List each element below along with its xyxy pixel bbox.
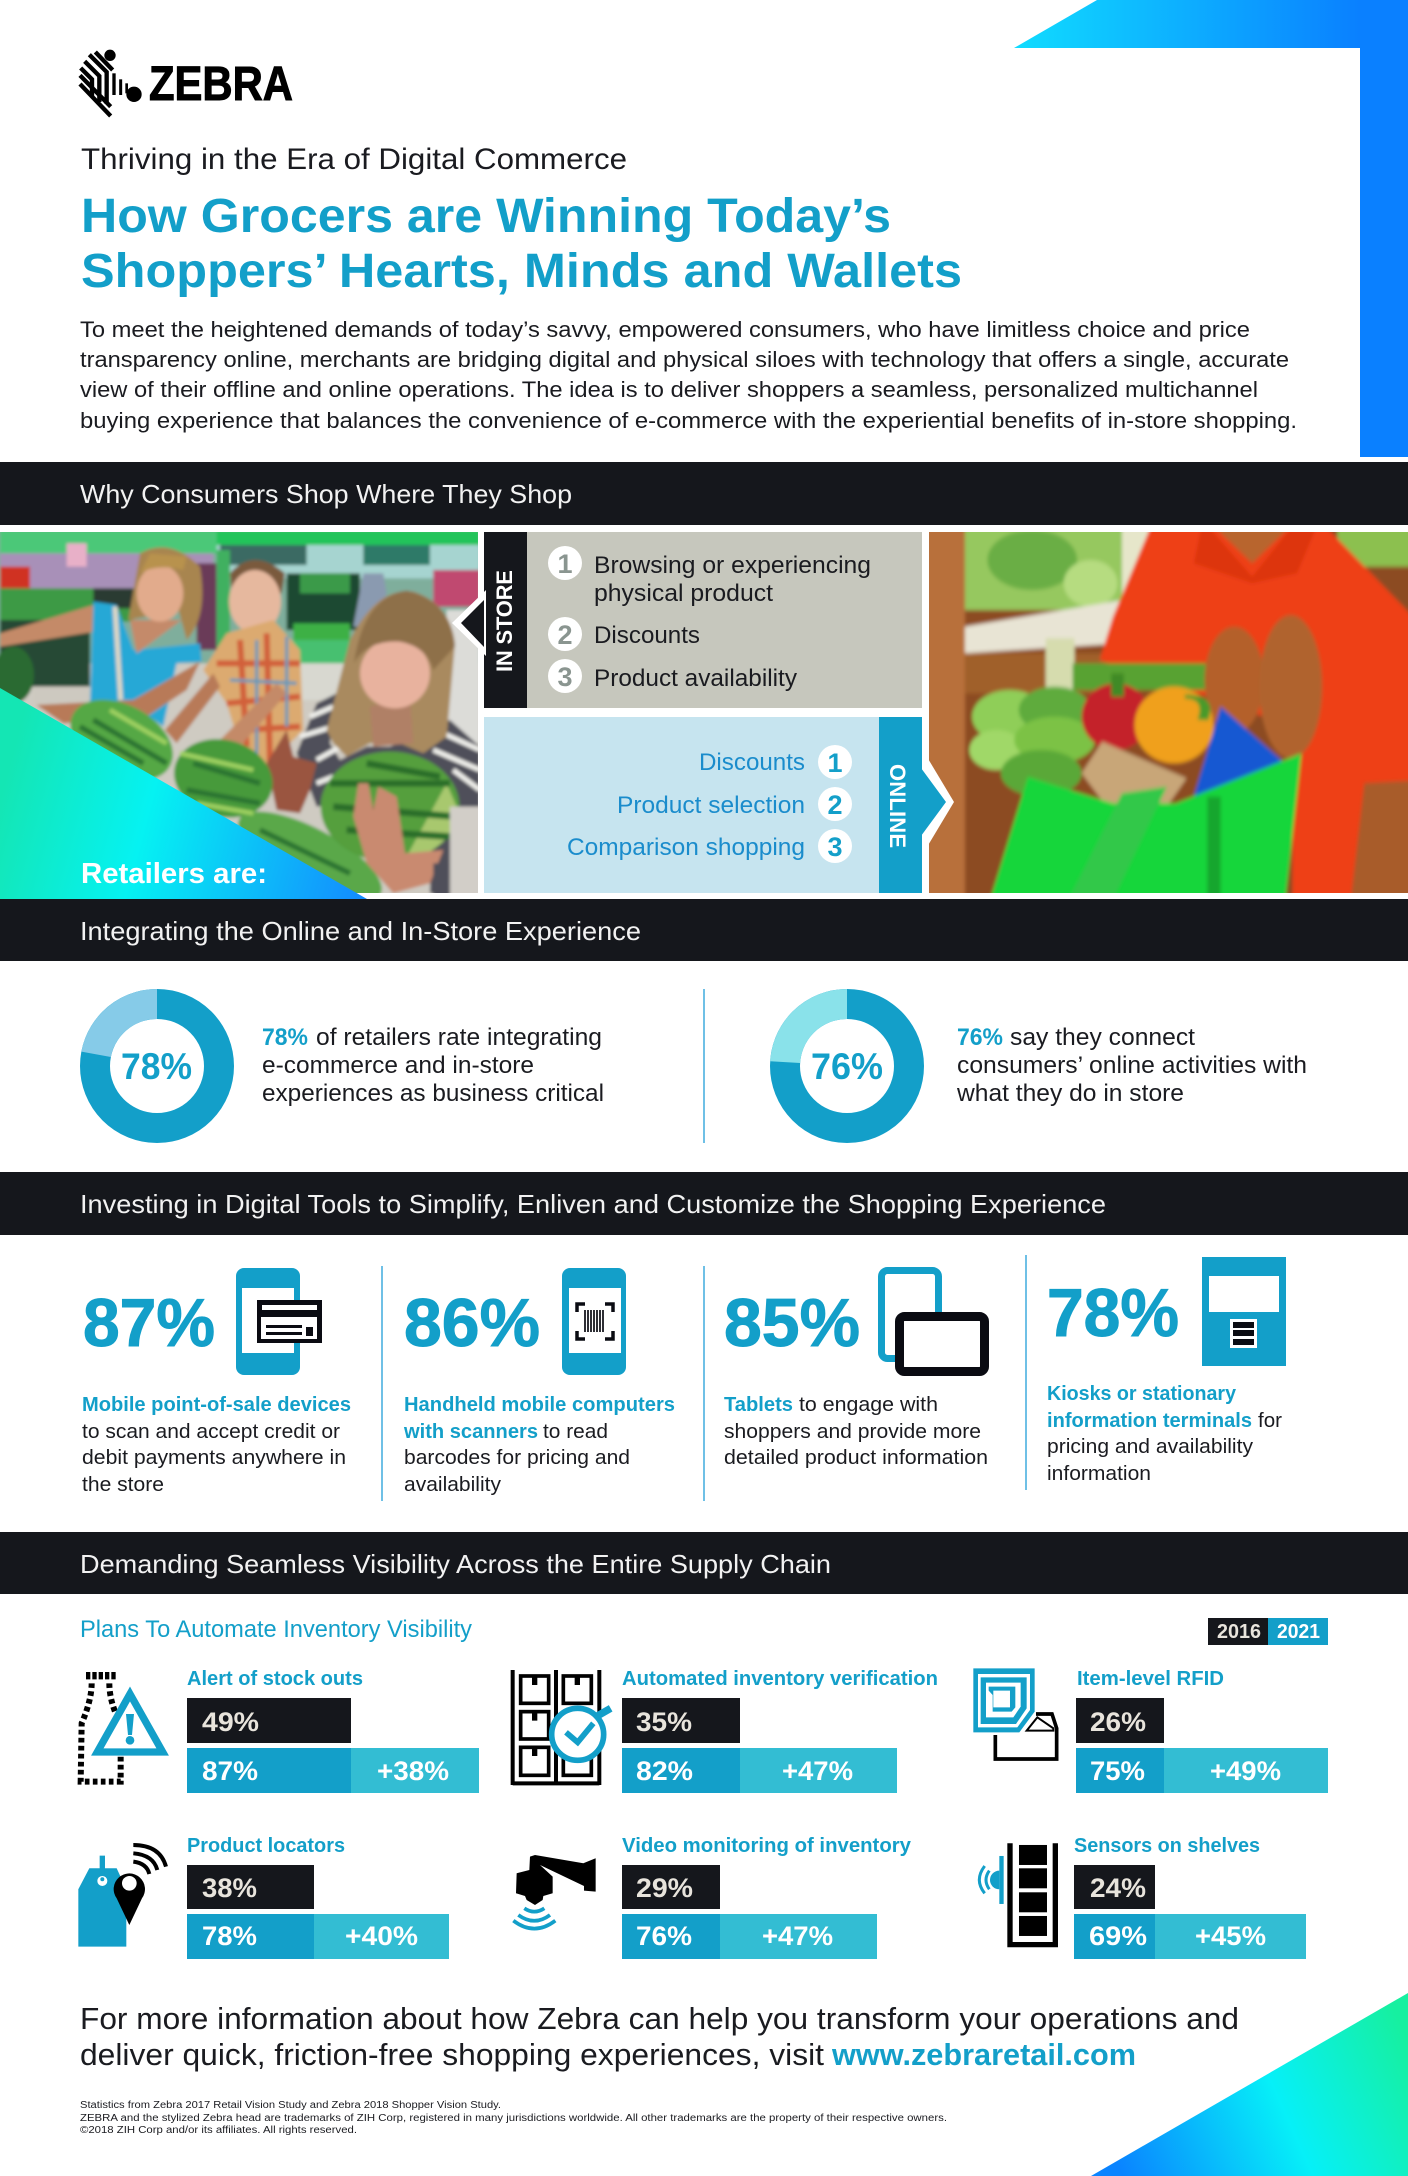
panel: in store xyxy=(452,532,922,708)
item: product locators: Product locators xyxy=(187,1834,345,1857)
item: automated inventory verification: +47% xyxy=(782,1756,853,1786)
donut chart: 76% xyxy=(770,989,909,1128)
panel: online: Discounts xyxy=(699,749,805,776)
panel: online: Product selection xyxy=(617,792,805,819)
call to action: deliver quick, friction-free shopping experiences, visit xyxy=(80,2037,824,2072)
item: sensors on shelves: 69% xyxy=(1089,1921,1147,1951)
item: video monitoring: +47% xyxy=(762,1921,833,1951)
watermelons xyxy=(0,647,34,703)
section band: why consumers shop: Why Consumers Shop Where They Shop xyxy=(80,479,572,509)
logo: Zebra xyxy=(80,50,293,116)
tool: tablets: detailed product information xyxy=(724,1446,988,1469)
item: video monitoring: 29% xyxy=(636,1873,693,1903)
donut chart: 78%: 78% xyxy=(121,1046,192,1087)
panel: online: 1 xyxy=(827,748,843,778)
donut chart: 76%: 76% xyxy=(811,1046,883,1087)
item: sensors on shelves: Sensors on shelves xyxy=(1074,1834,1260,1857)
icon: rfid tag on box xyxy=(973,1668,1057,1759)
title: Shoppers’ Hearts, Minds and Wallets xyxy=(81,245,962,298)
stat text: 76%: consumers’ online activities with xyxy=(957,1052,1307,1079)
panel: online: Comparison shopping xyxy=(567,834,805,861)
call to action: www.zebraretail.com xyxy=(831,2037,1136,2072)
stat text: 76% xyxy=(956,1024,1307,1107)
shoppers xyxy=(0,605,95,647)
panel: in store: Discounts xyxy=(594,622,700,649)
tool: kiosks: information terminals xyxy=(1047,1409,1252,1432)
tool: mobile point-of-sale xyxy=(82,1268,351,1496)
tool: handheld mobile computers: availability xyxy=(404,1473,502,1496)
tool: handheld mobile computers xyxy=(403,1268,675,1496)
tool: tablets: Tablets xyxy=(724,1393,793,1416)
item: video monitoring xyxy=(513,1834,912,1959)
decorative corner: top right gradient xyxy=(1014,0,1408,457)
stat text: 78%: e-commerce and in-store xyxy=(262,1052,534,1079)
tool: mobile point-of-sale: Mobile point-of-sale devices xyxy=(82,1393,351,1416)
legend: years: 2016 xyxy=(1217,1621,1261,1643)
legend: years: 2021 xyxy=(1277,1621,1320,1643)
decorative corner: bottom right gradient xyxy=(1091,1993,1408,2176)
intro paragraph: buying experience that balances the convenience of e-commerce with the experiential benefits of in-store shopping. xyxy=(80,408,1297,433)
tool: handheld mobile computers: 86% xyxy=(404,1285,540,1361)
tool: tablets xyxy=(724,1270,988,1469)
tool: kiosks: information xyxy=(1047,1462,1151,1485)
icon: stock-out alert xyxy=(81,1676,163,1782)
icon: security camera xyxy=(513,1855,596,1929)
photo: grocery bag delivery xyxy=(911,520,1408,900)
call to action: For more information about how Zebra can help you transform your operations and xyxy=(80,2001,1239,2036)
item: product locators: 78% xyxy=(202,1921,257,1951)
tool: kiosks: Kiosks or stationary xyxy=(1047,1382,1237,1405)
tool: kiosks: pricing and availability xyxy=(1047,1435,1254,1458)
item: alert of stock outs: +38% xyxy=(377,1756,449,1786)
tool: handheld mobile computers: to read xyxy=(543,1420,608,1443)
panel: in store: 1 xyxy=(557,549,573,579)
stat text: 76%: say they connect xyxy=(1010,1024,1195,1051)
icon: tag with location pin xyxy=(78,1845,166,1947)
item: item-level rfid: Item-level RFID xyxy=(1077,1667,1224,1690)
item: item-level rfid: +49% xyxy=(1210,1756,1281,1786)
intro paragraph xyxy=(80,317,1297,433)
section band: digital tools: Investing in Digital Tools to Simplify, Enliven and Customize the Shopping Experience xyxy=(80,1189,1106,1219)
tool: mobile point-of-sale: debit payments anywhere in xyxy=(82,1446,346,1469)
tool: handheld mobile computers: with scanners xyxy=(403,1420,538,1443)
item: sensors on shelves: +45% xyxy=(1195,1921,1266,1951)
icon: kiosk xyxy=(1202,1257,1286,1366)
intro paragraph: To meet the heightened demands of today’s savvy, empowered consumers, who have limitless choice and price xyxy=(80,317,1250,342)
tool: mobile point-of-sale: to scan and accept credit or xyxy=(82,1420,340,1443)
item: product locators: 38% xyxy=(202,1873,257,1903)
icon: shelves with check xyxy=(513,1670,611,1785)
stat text: 78% xyxy=(262,1024,604,1107)
item: item-level rfid xyxy=(973,1667,1328,1793)
item: automated inventory verification: 82% xyxy=(636,1756,693,1786)
tool: kiosks xyxy=(1047,1257,1286,1485)
stat text: 78%: experiences as business critical xyxy=(262,1080,604,1107)
item: alert of stock outs: 49% xyxy=(202,1707,259,1737)
icon: phone with barcode xyxy=(562,1268,626,1375)
tool: mobile point-of-sale: 87% xyxy=(83,1285,215,1361)
panel: in store: IN STORE xyxy=(492,570,517,672)
item: automated inventory verification: 35% xyxy=(636,1707,692,1737)
item: sensors on shelves xyxy=(979,1834,1306,1959)
legend: years xyxy=(1208,1618,1328,1645)
footnotes: Statistics from Zebra 2017 Retail Vision Study and Zebra 2018 Shopper Vision Study. xyxy=(80,2100,501,2111)
tool: handheld mobile computers: barcodes for pricing and xyxy=(404,1446,630,1469)
footnotes: ©2018 ZIH Corp and/or its affiliates. All rights reserved. xyxy=(80,2125,357,2136)
gradient corner: retailers are xyxy=(0,688,367,899)
intro paragraph: transparency online, merchants are bridging digital and physical siloes with technology that offers a single, accurate xyxy=(80,347,1289,372)
photo: family choosing watermelons xyxy=(0,532,478,893)
icon: shelf sensor xyxy=(979,1843,1055,1945)
footnotes xyxy=(80,2100,947,2136)
item: product locators xyxy=(78,1834,449,1959)
section band: integrating xyxy=(0,899,1408,961)
item: automated inventory verification: Automated inventory verification xyxy=(622,1667,938,1690)
kicker heading: Thriving in the Era of Digital Commerce xyxy=(81,143,627,176)
section band: integrating: Integrating the Online and In-Store Experience xyxy=(80,916,641,946)
stat text: 78%: of retailers rate integrating xyxy=(316,1024,602,1051)
title: How Grocers are Winning Today’s xyxy=(81,190,891,243)
item: video monitoring: 76% xyxy=(636,1921,692,1951)
item: automated inventory verification xyxy=(513,1667,938,1793)
stat text: 76%: 76% xyxy=(957,1024,1003,1051)
tool: tablets: to engage with xyxy=(799,1393,938,1416)
item: alert of stock outs: Alert of stock outs xyxy=(187,1667,363,1690)
panel: in store: 2 xyxy=(557,620,573,650)
tool: kiosks: 78% xyxy=(1047,1275,1179,1351)
tool: handheld mobile computers: Handheld mobile computers xyxy=(404,1393,675,1416)
item: sensors on shelves: 24% xyxy=(1090,1873,1146,1903)
title xyxy=(81,190,962,298)
subheading: Plans To Automate Inventory Visibility xyxy=(80,1616,472,1643)
tool: tablets: shoppers and provide more xyxy=(724,1420,981,1443)
icon: tablet pair xyxy=(882,1270,984,1372)
section band: digital tools xyxy=(0,1172,1408,1235)
panel: online: 3 xyxy=(827,832,843,862)
logo: Zebra: ZEBRA xyxy=(149,58,293,111)
item: product locators: +40% xyxy=(345,1921,418,1951)
call to action xyxy=(80,2001,1239,2072)
panel: in store: Product availability xyxy=(594,665,797,692)
stat text: 78%: 78% xyxy=(262,1024,308,1051)
panel: online xyxy=(484,717,954,893)
panel: in store: 3 xyxy=(557,662,573,692)
tool: tablets: 85% xyxy=(724,1285,860,1361)
section band: supply chain: Demanding Seamless Visibility Across the Entire Supply Chain xyxy=(80,1549,831,1579)
section band: supply chain xyxy=(0,1532,1408,1594)
section band: why consumers shop xyxy=(0,462,1408,525)
tool: kiosks: for xyxy=(1258,1409,1282,1432)
item: item-level rfid: 75% xyxy=(1090,1756,1145,1786)
item: alert of stock outs xyxy=(81,1667,479,1793)
item: alert of stock outs: 87% xyxy=(202,1756,258,1786)
panel: online: ONLINE xyxy=(885,764,910,848)
footnotes: ZEBRA and the stylized Zebra head are trademarks of ZIH Corp, registered in many jurisdictions worldwide. All other trademarks are the property of their respective owners. xyxy=(80,2113,947,2124)
panel: in store: Browsing or experiencing xyxy=(594,552,871,579)
gradient corner: retailers are: Retailers are: xyxy=(81,858,267,890)
stat text: 76%: what they do in store xyxy=(956,1080,1184,1107)
item: video monitoring: Video monitoring of inventory xyxy=(622,1834,912,1857)
donut chart: 78% xyxy=(81,989,219,1128)
item: item-level rfid: 26% xyxy=(1090,1707,1146,1737)
icon: phone with credit card xyxy=(236,1268,322,1375)
panel: in store: physical product xyxy=(594,580,773,607)
panel: online: 2 xyxy=(827,790,843,820)
intro paragraph: view of their offline and online operations. The idea is to deliver shoppers a seamless, personalized multichannel xyxy=(80,377,1258,402)
tool: mobile point-of-sale: the store xyxy=(82,1473,164,1496)
